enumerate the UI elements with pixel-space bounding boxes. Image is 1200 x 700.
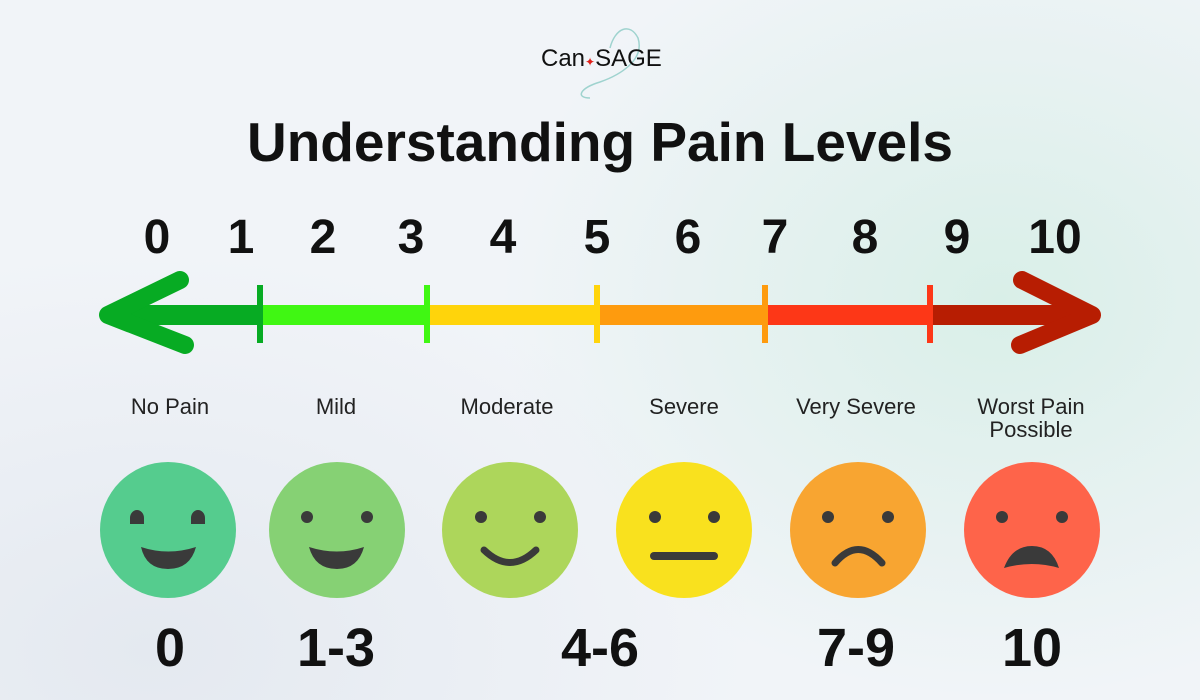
scale numbers: 10: [1028, 211, 1082, 264]
scale numbers: 0: [144, 211, 170, 264]
scale numbers: 9: [944, 211, 970, 264]
scale numbers: 8: [852, 211, 878, 264]
labels: Mild: [316, 394, 356, 419]
scale numbers: 1: [228, 211, 254, 264]
logo: Can✦SAGE: [541, 45, 662, 72]
scale numbers: 7: [762, 211, 788, 264]
labels: Moderate: [461, 394, 553, 419]
labels: Severe: [649, 394, 719, 419]
bottom ranges: 4-6: [561, 618, 639, 678]
bottom ranges: 10: [1002, 618, 1062, 678]
scale numbers: 5: [584, 211, 610, 264]
bottom ranges: 0: [155, 618, 185, 678]
bottom ranges: 7-9: [817, 618, 895, 678]
arrow scale: [99, 271, 1101, 354]
labels: No Pain: [131, 394, 209, 419]
logo: [541, 28, 662, 99]
title: Understanding Pain Levels: [247, 111, 953, 173]
labels: [131, 394, 1085, 442]
labels: Worst Pain: [977, 394, 1085, 419]
scale numbers: 4: [490, 211, 516, 264]
scale numbers: 3: [398, 211, 424, 264]
scale numbers: 6: [675, 211, 701, 264]
labels: Very Severe: [796, 394, 916, 419]
scale numbers: 2: [310, 211, 336, 264]
bottom ranges: [155, 618, 1062, 678]
scale numbers: [144, 211, 1082, 264]
faces: [100, 462, 1100, 598]
labels: Possible: [989, 417, 1073, 442]
bottom ranges: 1-3: [297, 618, 375, 678]
